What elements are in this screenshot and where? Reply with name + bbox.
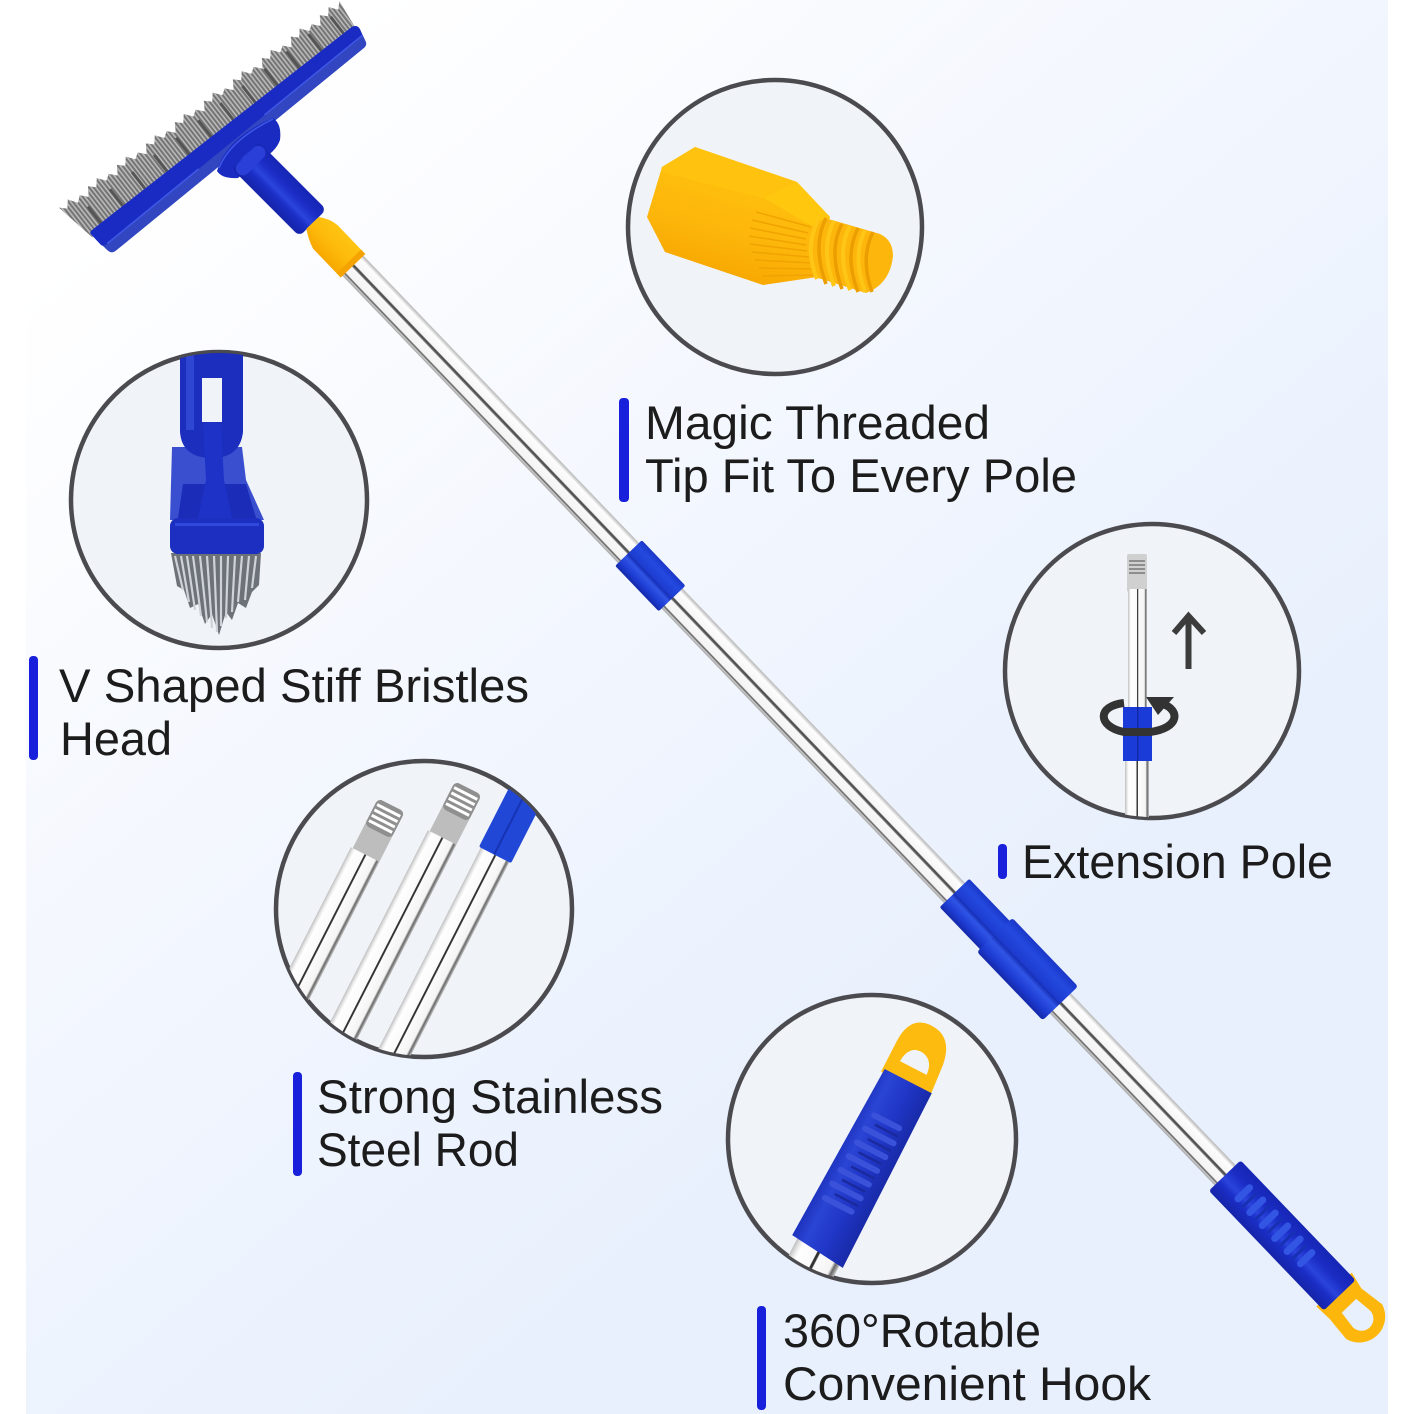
rod three with blue collar <box>378 788 536 1056</box>
ring arrow back <box>1104 703 1174 732</box>
front edge <box>170 518 264 554</box>
label: Magic Threaded Tip: Magic Threaded <box>645 396 990 449</box>
thread tip <box>1127 554 1147 592</box>
tube <box>232 142 326 236</box>
neck yoke <box>180 350 243 458</box>
label: Strong Stainless Steel Rod: Steel Rod <box>317 1123 519 1176</box>
label: 360 Rotable Convenient Hook <box>757 1304 1152 1410</box>
circle: extension pole detail <box>1005 524 1299 820</box>
label: Magic Threaded Tip: Tip Fit To Every Pole <box>645 449 1077 502</box>
blue collar: upper joint <box>615 540 685 611</box>
rod <box>1128 589 1147 709</box>
up arrow <box>1174 616 1204 669</box>
icon: brush head end view <box>170 350 264 635</box>
rod one <box>290 800 404 1000</box>
handle grip <box>1206 1159 1395 1353</box>
stainless steel pole <box>338 251 1242 1192</box>
icon: extending pole with twist arrows <box>1104 554 1204 820</box>
circle: hook handle detail <box>728 995 1016 1307</box>
hub <box>217 118 280 178</box>
label: 360 Rotable Convenient Hook: Convenient Hook <box>783 1357 1152 1410</box>
blue collar: lower joint <box>937 876 1078 1020</box>
hook <box>1316 1273 1395 1353</box>
thread <box>809 219 893 293</box>
yellow hook <box>881 1022 946 1098</box>
bar top face <box>89 24 368 248</box>
icon: three steel rods <box>290 783 536 1056</box>
label: Strong Stainless Steel Rod <box>293 1070 663 1176</box>
product: extension brush pole <box>330 244 1396 1353</box>
label: Extension Pole: Extension Pole <box>1022 835 1333 888</box>
stem <box>198 422 232 518</box>
icon: handle with rotatable hook <box>788 1022 946 1277</box>
rod two <box>330 783 480 1040</box>
bristles <box>59 1 366 252</box>
label: Strong Stainless Steel Rod: Strong Stainless <box>317 1070 663 1123</box>
label: Magic Threaded Tip <box>619 396 1077 502</box>
label: 360 Rotable Convenient Hook: 360°Rotable <box>783 1304 1041 1357</box>
label: V Shaped Stiff Bristles <box>29 656 529 765</box>
circle: V shaped bristle head detail <box>71 350 367 648</box>
circle: threaded tip detail <box>628 80 922 374</box>
bar ridge highlight <box>103 35 367 243</box>
steel end <box>788 1238 840 1277</box>
bar lower face <box>89 24 375 257</box>
recess <box>178 484 256 518</box>
circle: stainless steel rods detail <box>269 761 572 1068</box>
plate back <box>170 447 264 520</box>
product: brush head <box>52 0 380 278</box>
icon: yellow threaded tip <box>647 147 893 293</box>
grip <box>789 1066 933 1268</box>
yellow threaded cap <box>300 211 365 278</box>
label: V Shaped Stiff Bristles: V Shaped Stiff Bristles <box>59 659 529 712</box>
bristles <box>171 553 261 635</box>
collar <box>1123 707 1152 761</box>
label: V Shaped Stiff Bristles: Head <box>60 712 172 765</box>
